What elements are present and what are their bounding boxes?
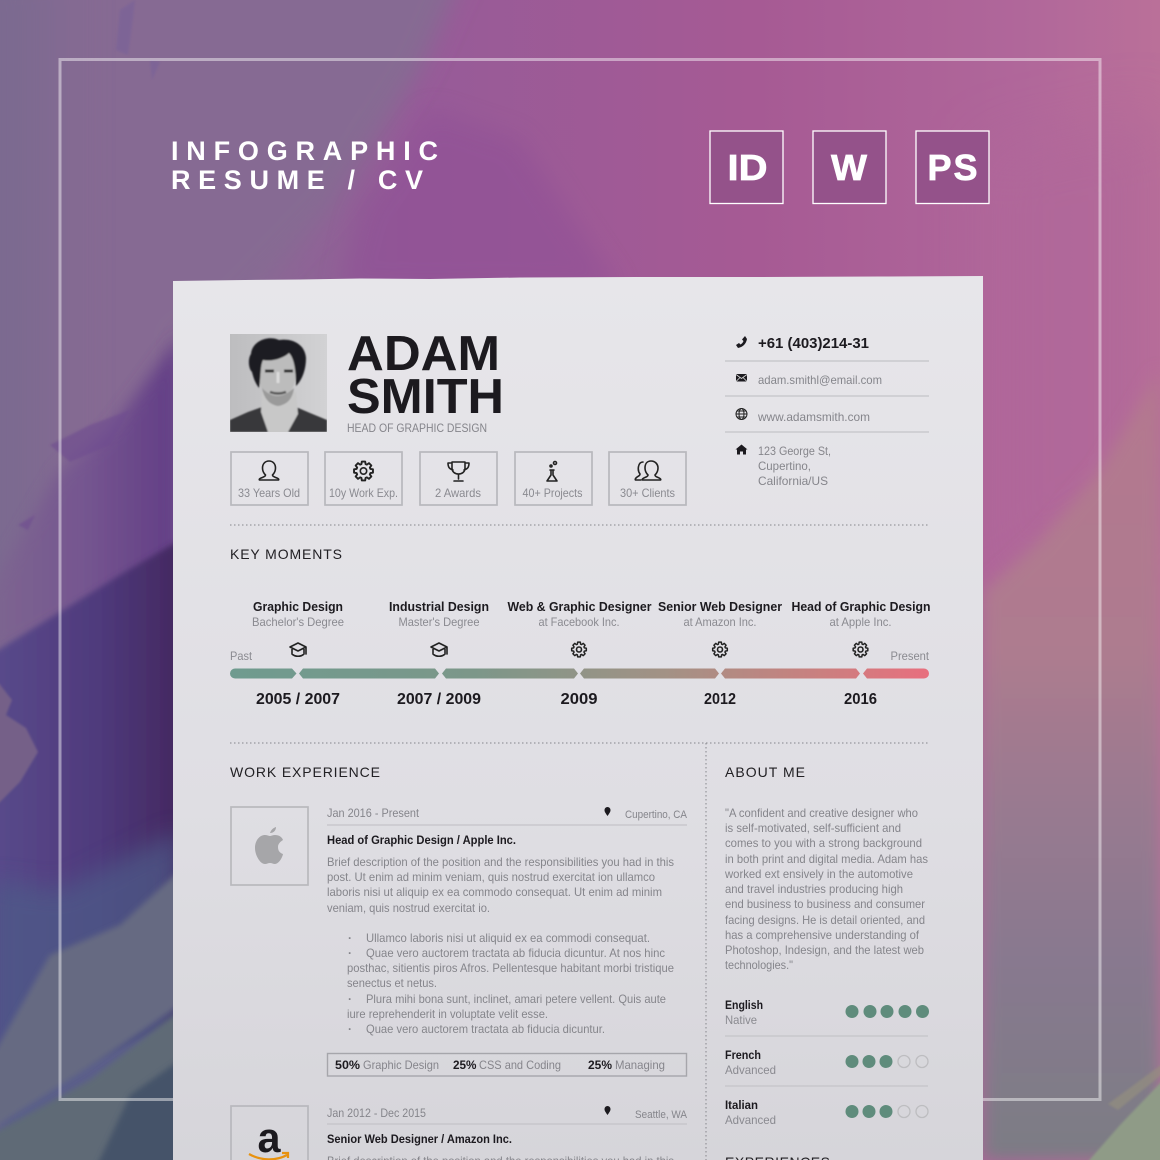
language: french: Advanced xyxy=(725,1063,776,1077)
logo box: amazon: a xyxy=(258,1114,281,1160)
title xyxy=(171,136,438,195)
moment: industrial design: Master's Degree xyxy=(398,615,480,629)
bullet list xyxy=(347,931,674,1036)
about text: is self-motivated, self-sufficient and xyxy=(725,821,901,835)
moment: industrial design: Industrial Design xyxy=(389,599,489,614)
email: adam.smithl@email.com xyxy=(758,373,882,387)
icon: graduation cap 1 xyxy=(290,643,306,656)
stat: age: 33 Years Old xyxy=(238,486,300,500)
moment: graphic design xyxy=(252,599,344,629)
bullet list: Quae vero auctorem tractata ab fiducia dicuntur. At nos hinc xyxy=(366,946,665,960)
job title: HEAD OF GRAPHIC DESIGN xyxy=(347,421,487,435)
job description: veniam, quis nostrud exercitat io. xyxy=(327,901,490,915)
about text: "A confident and creative designer who xyxy=(725,806,918,820)
software badges xyxy=(710,131,989,204)
moment: graphic design: Bachelor's Degree xyxy=(252,615,344,629)
job: apple xyxy=(231,806,688,1076)
name: ADAM xyxy=(347,327,500,381)
gradient bar xyxy=(230,668,929,678)
stat: projects xyxy=(515,452,592,505)
stat: projects: 40+ Projects xyxy=(522,486,582,500)
language: italian: Advanced xyxy=(725,1113,776,1127)
badge: W: W xyxy=(831,147,867,188)
heading: work experience: WORK EXPERIENCE xyxy=(230,764,380,780)
location: Seattle, WA xyxy=(635,1109,688,1121)
stat: work experience: 10y Work Exp. xyxy=(329,486,398,500)
address: 123 George St, xyxy=(758,444,831,458)
stat: clients xyxy=(609,452,686,505)
moment: apple: Head of Graphic Design xyxy=(792,599,931,614)
about text: end business to business and consumer xyxy=(725,897,925,911)
bullet list: posthac, sitientis piros Afros. Pellentesque habitant morbi tristique xyxy=(347,961,674,975)
icon: home xyxy=(736,444,748,454)
bullet list: · xyxy=(348,931,352,945)
stat: awards: 2 Awards xyxy=(435,486,481,500)
about text: worked ext ensively in the automotive xyxy=(724,867,913,881)
job: amazon xyxy=(231,1106,688,1160)
bullet list: Quae vero auctorem tractata ab fiducia dicuntur. xyxy=(366,1022,605,1036)
language: english: Native xyxy=(725,1013,757,1027)
logo box: amazon xyxy=(231,1106,308,1160)
icon: globe xyxy=(736,408,747,420)
moment: facebook xyxy=(508,599,652,629)
icon: gear 1 xyxy=(572,642,586,657)
icon: graduation cap 2 xyxy=(431,643,447,656)
job description: Brief description of the position and the responsibilities you had in this xyxy=(327,855,674,869)
moment: facebook: Web & Graphic Designer xyxy=(508,599,652,614)
language: italian: Italian xyxy=(725,1098,758,1112)
title: RESUME / CV xyxy=(171,165,423,195)
icon: pin xyxy=(604,1106,610,1115)
moment: apple: at Apple Inc. xyxy=(830,615,892,629)
badge: W xyxy=(813,131,886,204)
badge: PS: PS xyxy=(928,147,978,188)
badge: ID: ID xyxy=(728,147,768,188)
years xyxy=(256,691,877,708)
icon: gear 3 xyxy=(853,642,868,657)
language: english xyxy=(725,998,929,1027)
stat: awards xyxy=(420,452,497,505)
job description: laboris nisi ut aliquip ex ea commodo consequat. Ut enim ad minim xyxy=(327,885,662,899)
skill breakdown box: 25% xyxy=(588,1058,612,1072)
about text: in both print and digital media. Adam has xyxy=(725,852,928,866)
about text: Photoshop, Indesign, and the latest web xyxy=(725,943,924,957)
skill breakdown box: 50% xyxy=(335,1058,360,1072)
moment: amazon: at Amazon Inc. xyxy=(684,615,756,629)
heading: key moments: KEY MOMENTS xyxy=(230,546,342,562)
icon: gear 2 xyxy=(713,642,727,657)
icon: pin xyxy=(604,807,610,816)
about text: and travel industries producing high xyxy=(725,882,903,896)
bullet list: · xyxy=(348,992,352,1006)
stat: age xyxy=(231,452,308,505)
years: 2005 / 2007 xyxy=(256,691,340,708)
bullet list: Plura mihi bona sunt, inclinet, amari petere vellent. Quis aute xyxy=(366,992,666,1006)
moment: amazon: Senior Web Designer xyxy=(658,599,782,614)
heading: about me: ABOUT ME xyxy=(725,764,805,780)
bullet list: iure reprehenderit in voluptate velit esse. xyxy=(347,1007,548,1021)
bullet list: Ullamco laboris nisi ut aliquid ex ea commodi consequat. xyxy=(366,931,650,945)
skill breakdown box: Graphic Design xyxy=(363,1058,439,1072)
language: english: English xyxy=(725,998,763,1012)
years: 2007 / 2009 xyxy=(397,691,481,708)
bullet list: · xyxy=(348,1022,352,1036)
years: 2012 xyxy=(704,691,736,708)
job dates: Jan 2016 - Present xyxy=(327,806,420,820)
language: french xyxy=(725,1048,928,1077)
job title: Senior Web Designer / Amazon Inc. xyxy=(327,1132,512,1146)
name xyxy=(347,327,504,424)
skill breakdown box: CSS and Coding xyxy=(479,1058,561,1072)
timeline xyxy=(230,599,931,708)
about text: facing designs. He is detail oriented, and xyxy=(725,913,925,927)
language: french: French xyxy=(725,1048,761,1062)
label: present: Present xyxy=(890,649,930,663)
moment: amazon xyxy=(658,599,782,629)
label: past: Past xyxy=(230,649,253,663)
job dates: Jan 2012 - Dec 2015 xyxy=(327,1106,426,1120)
address: California/US xyxy=(758,474,828,488)
moment: graphic design: Graphic Design xyxy=(253,599,343,614)
about text xyxy=(724,806,928,972)
years: 2016 xyxy=(844,691,877,708)
skill breakdown box: 25% xyxy=(453,1058,477,1072)
photo: portrait xyxy=(230,334,327,432)
icon: phone xyxy=(736,336,747,348)
skill breakdown box xyxy=(328,1054,686,1076)
moment: industrial design xyxy=(389,599,489,629)
bullet list: senectus et netus. xyxy=(347,976,437,990)
skill breakdown box: Managing xyxy=(615,1058,665,1072)
location: Cupertino, CA xyxy=(625,809,688,821)
job title: Head of Graphic Design / Apple Inc. xyxy=(327,833,516,847)
badge: ID xyxy=(710,131,783,204)
icon: mail xyxy=(736,374,747,382)
stat boxes xyxy=(231,452,686,505)
language: italian xyxy=(725,1098,928,1127)
badge: PS xyxy=(916,131,989,204)
address: Cupertino, xyxy=(758,459,811,473)
title: INFOGRAPHIC xyxy=(171,136,438,166)
logo box: apple xyxy=(231,807,308,885)
address xyxy=(758,444,831,488)
name: SMITH xyxy=(347,370,504,424)
stat: work experience xyxy=(325,452,402,505)
bullet list: · xyxy=(348,946,352,960)
stat: clients: 30+ Clients xyxy=(620,486,675,500)
about text: comes to you with a strong background xyxy=(725,836,922,850)
contact details xyxy=(725,335,929,488)
years: 2009 xyxy=(560,691,598,708)
job description xyxy=(327,855,674,915)
about text: has a comprehensive understanding of xyxy=(725,928,920,942)
phone number: +61 (403)214-31 xyxy=(758,335,869,352)
moment: apple xyxy=(792,599,931,629)
panel: resume paper xyxy=(173,276,983,1160)
website: www.adamsmith.com xyxy=(757,410,870,424)
job description: post. Ut enim ad minim veniam, quis nostrud exercitat ion ullamco xyxy=(327,870,655,884)
moment: facebook: at Facebook Inc. xyxy=(538,615,620,629)
about text: technologies." xyxy=(725,958,793,972)
